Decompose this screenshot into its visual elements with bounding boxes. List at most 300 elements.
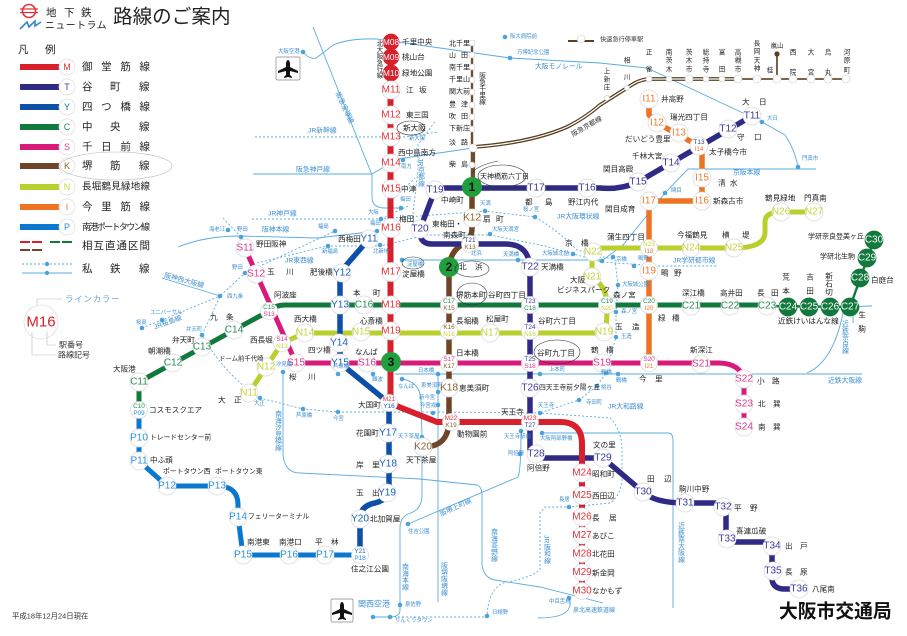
stations: Tanimachi: T29 (594, 452, 612, 464)
station name labels: 下新庄 (449, 124, 470, 132)
railway line names in blue: 近鉄大阪線 (828, 376, 862, 384)
stations: Nagahori Tsurumi-ryokuchi: N14 (296, 328, 315, 338)
stations: Nagahori Tsurumi-ryokuchi: N27 (805, 206, 824, 218)
stations: Chuo: C25 (800, 302, 819, 312)
station name labels: 正雀 (646, 48, 653, 74)
station name labels: 北浜 (459, 262, 483, 272)
private station names in blue: 梅田 (400, 195, 411, 203)
interchange stations with two numbers: K19 (445, 422, 457, 429)
stations: Chuo: C14 (225, 324, 244, 336)
stations: Sennichimae: S12 (247, 268, 265, 280)
Hankyu railway lines (469, 35, 850, 187)
interchange stations with two numbers: S17 (443, 356, 455, 363)
private station names in blue: 鶴橋 (616, 376, 627, 384)
station name labels: 河原町 (844, 48, 851, 74)
key: pointers (32, 332, 56, 355)
private station names in blue: 京橋 (616, 255, 627, 263)
stations: Imazatosuji (640, 90, 711, 280)
stations: Sakaisuji: K18 (440, 382, 458, 394)
private station names in blue: 今宮 (333, 414, 344, 422)
private station names in blue: 寺田町 (586, 398, 603, 406)
Hankyu link Nishinakajima to Awaji (391, 98, 473, 160)
stations: Chuo (130, 231, 884, 391)
Senboku rapid line (538, 598, 570, 618)
stations: Sennichimae: S22 (735, 374, 753, 384)
private station names in blue: 住吉公園 (408, 527, 430, 535)
station name labels: 西中島南方 (398, 147, 436, 157)
stations: Midosuji: M13 (381, 132, 401, 142)
private station names in blue: 大阪城公園 (622, 280, 649, 288)
station name labels: 八尾南 (812, 584, 835, 594)
private station names in blue: 天王寺 (538, 401, 555, 409)
railway line names in blue (153, 62, 862, 614)
private station names in blue: 天満 (480, 200, 491, 207)
stations: Chuo: C11 (130, 376, 148, 388)
Hanshin Nishi-Osaka line (162, 278, 220, 296)
stations: Nagahori Tsurumi-ryokuchi: N24 (682, 242, 701, 254)
station name labels: 天王寺 (501, 408, 524, 416)
private station names in blue: 森ノ宮 (621, 307, 637, 315)
station name labels: 富田 (719, 48, 726, 74)
stations: Sakaisuji: K20 (414, 442, 432, 452)
line: Nagahori Tsurumi-ryokuchi (249, 212, 814, 393)
station name labels: 鴫野 (661, 268, 682, 278)
Hanshin main line (178, 231, 378, 247)
station name labels: 鶴見緑地 (765, 192, 796, 202)
station name labels: 九条 (210, 312, 234, 322)
stations: Midosuji: M19 (381, 326, 401, 336)
stations: Midosuji: M16 (381, 222, 401, 234)
stations: Nagahori Tsurumi-ryokuchi: N15 (352, 326, 371, 338)
station name labels: 玉川 (267, 268, 294, 276)
stations: Midosuji: M09 (383, 52, 399, 62)
station name labels: 西長堀 (250, 336, 273, 344)
private station names in blue: 芦原橋 (333, 362, 350, 370)
station name labels: 新深江 (690, 346, 713, 354)
station name labels: 南森町 (443, 230, 466, 240)
station name labels: 岸里 (356, 460, 380, 470)
icon: subway logo (20, 4, 38, 18)
private station names in blue: 海老江 (209, 225, 226, 233)
legend: Chuo: C (64, 122, 71, 132)
station name labels: 朝潮橋 (148, 346, 171, 356)
legend: Chuo: 中央線 (82, 120, 150, 133)
stations: Tanimachi: T14 (662, 158, 680, 168)
private station names in blue: 長居 (559, 496, 570, 503)
stations: Chuo: C23 (758, 300, 777, 312)
stations: Nagahori Tsurumi-ryokuchi: N26 (772, 206, 791, 218)
railway line names in blue: 南海汐見橋線 (274, 409, 282, 452)
interchange stations with two numbers: T24 (524, 324, 536, 331)
Hankyu Senri rapid section (471, 148, 475, 187)
private station names in blue: 芦原橋 (296, 411, 313, 419)
station name labels: コスモスクエア (149, 406, 203, 414)
private station names in blue: 泉佐野 (405, 600, 422, 608)
station name labels: 大阪 (570, 274, 586, 284)
legend: Nagahori Tsurumi-ryokuchi: N (64, 182, 70, 192)
railway line names in blue: JR学研都市線 (673, 256, 715, 264)
line: Chuo east (767, 240, 874, 307)
station name labels: 谷町九丁目 (537, 348, 575, 358)
stations: Yotsubashi: Y14 (330, 338, 348, 348)
legend: Yotsubashi (20, 99, 150, 115)
marker 1: 1 (469, 180, 476, 194)
private station names in blue: 門真市 (802, 154, 819, 162)
interchange stations with two numbers: C10 (133, 403, 145, 410)
interchange stations with two numbers: M21 (383, 396, 396, 403)
legend: Yotsubashi: Y (64, 102, 70, 112)
station name labels: 守口 (737, 132, 762, 142)
station name labels: 鶴橋 (591, 344, 614, 354)
station name labels: 学研北生駒 (820, 252, 855, 260)
station name labels: 天下茶屋 (406, 454, 437, 464)
private station names in blue: 阪大病院前 (510, 32, 538, 40)
legend: private railways (22, 262, 150, 275)
label: new tram: ニュートラム (45, 20, 107, 32)
Hankai Uemachi line (408, 431, 521, 524)
station name labels: 江坂 (406, 84, 427, 94)
station name labels: 文の里 (593, 440, 616, 450)
stations: Yotsubashi: Y11 (360, 234, 378, 244)
interchange stations with two numbers: N16 (524, 331, 536, 338)
stations: Port Town (130, 429, 334, 564)
private station names in blue: 上本町 (549, 365, 566, 373)
stations: Tanimachi: T20 (411, 224, 429, 234)
private station names in blue: 鶴橋 (601, 368, 612, 376)
station name labels: 深江橋 (682, 288, 705, 298)
stations: Tanimachi: T11 (744, 110, 761, 122)
Hankyu Kobe line and Umeda spur (253, 163, 401, 208)
stations: Sennichimae: S23 (735, 398, 753, 410)
stations: Tanimachi: T16 (578, 182, 596, 194)
station name labels: 花園町 (356, 428, 379, 438)
railway line names in blue: JR阪和線 (542, 535, 551, 565)
railway line names in blue: JR京都線 (416, 158, 425, 188)
station name labels: 今里 (639, 374, 663, 384)
private station names in blue: ユニバーサル (150, 309, 183, 316)
legend: Midosuji: 御堂筋線 (82, 60, 150, 73)
legend: Sakaisuji: 堺筋線 (82, 159, 150, 172)
station name labels: 天満橋 (541, 262, 564, 272)
station name labels: 緑橋 (658, 312, 680, 322)
Nankai Shiomibashi and Koya lines (283, 372, 603, 603)
private station names in blue: 野田 (232, 263, 243, 271)
stations: Chuo: C29 (858, 252, 877, 264)
station name labels: 太子橋今市 (709, 146, 747, 156)
stations: Chuo: C22 (721, 300, 740, 312)
interchange stations with two numbers: Y16 (383, 403, 395, 410)
station name labels: 長堀橋 (456, 316, 479, 326)
header: operator logo and title (20, 4, 231, 32)
station name labels: なかもず (592, 586, 623, 596)
station name labels: 住之江公園 (351, 564, 389, 574)
station name labels: 西梅田 (338, 234, 361, 244)
station name labels: 田 (461, 52, 468, 60)
private station names in blue: 北新地 (373, 247, 390, 255)
stations: Midosuji: M18 (381, 300, 401, 310)
line: Sakaisuji (423, 187, 472, 447)
stations: Imazatosuji: I17 (642, 196, 656, 206)
stations: Tanimachi: T19 (426, 184, 444, 196)
interchange stations with two numbers: S13 (263, 311, 275, 318)
station name labels: 堺筋本町 (456, 290, 487, 300)
station name labels: 出戸 (785, 540, 808, 550)
private station names in blue: 玉造 (621, 332, 632, 340)
interchange stations with two numbers: S18 (524, 363, 536, 370)
station name labels: 長居 (592, 514, 617, 522)
railway line names in blue: 近鉄奈良線 (840, 319, 849, 355)
stations: Midosuji: M12 (381, 110, 401, 120)
stations: Chuo: C28 (851, 272, 870, 284)
marker 3: 3 (388, 355, 395, 369)
station name labels: だいどう豊里 (625, 134, 671, 144)
interchange stations with two numbers: S20 (643, 356, 655, 363)
stations: Nagahori Tsurumi-ryokuchi (240, 203, 824, 402)
station name labels: 昭和町 (592, 470, 615, 478)
station name labels: 今福鶴見 (677, 230, 708, 240)
station name labels: 新大阪 (403, 122, 426, 132)
station name labels: 四天王寺前夕陽ヶ丘 (539, 382, 600, 392)
railway line names in blue: 京阪本線 (733, 168, 760, 176)
private station names in blue: 福島 (318, 222, 329, 230)
station name labels: 森ノ宮 (613, 290, 636, 300)
interchange stations with two numbers: T21 (464, 237, 476, 244)
stations: Tanimachi: T32 (714, 502, 732, 512)
interchange stations with two numbers: K17 (443, 363, 455, 370)
legend: Nanko Port Town: 南港ポートタウン線 (82, 221, 150, 232)
railway line names in blue: 阪堺上町線 (438, 496, 473, 518)
stations: Midosuji: M24 (572, 468, 592, 478)
station name labels: 長岡天神 (754, 40, 761, 72)
station name labels: ドーム前千代崎 (219, 354, 264, 362)
private station names in blue: 弁天町 (186, 325, 203, 333)
railway line names in blue: 大阪モノレール (535, 62, 583, 70)
stations: Sennichimae: S21 (692, 358, 710, 370)
rapid express stop key (568, 35, 643, 44)
marker 2: 2 (446, 260, 453, 274)
station name labels: 谷町六丁目 (538, 316, 576, 326)
station name labels: 新森古市 (713, 196, 744, 206)
station name labels: 南茨木 (666, 48, 673, 74)
operator name: 大阪市交通局 (779, 600, 892, 622)
interchange stations with two numbers: C18 (524, 305, 536, 312)
stations: Midosuji (381, 34, 592, 600)
private station names in blue: 難波 (372, 375, 383, 383)
railway line names in blue: 阪急宝塚線 (334, 90, 356, 125)
railway line names in blue: JR新幹線 (308, 126, 337, 134)
station name labels (113, 36, 894, 596)
stations: Midosuji: M08 (383, 37, 399, 47)
Hankyu Senri stations (469, 40, 850, 168)
legend: Tanimachi: 谷町線 (82, 80, 150, 93)
station name labels: 南巽 (758, 422, 781, 432)
private station names in blue: 大阪 (368, 208, 379, 216)
legend: Sennichimae: S (64, 142, 70, 152)
legend: Imazatosuji: 今里筋線 (82, 200, 150, 213)
station name labels: 大阪港 (113, 364, 136, 374)
stations: Nagahori Tsurumi-ryokuchi: N25 (725, 242, 744, 254)
legend: Chuo (20, 119, 150, 135)
station name labels: 柴島 (449, 160, 468, 168)
interchange stations with two numbers: C17 (443, 298, 455, 305)
stations: Midosuji: M30 (572, 586, 592, 596)
dashed link Ebie (223, 218, 245, 248)
line: Yotsubashi (340, 239, 389, 555)
key: line colour pointer (37, 299, 62, 312)
subway lines (139, 41, 874, 591)
marker 1 (462, 177, 482, 197)
stations: Sennichimae: S11 (236, 242, 254, 254)
legend: Sakaisuji (20, 152, 172, 180)
stations: Midosuji: M27 (572, 530, 592, 541)
station name labels: 弁天町 (172, 334, 195, 344)
stations: Nagahori Tsurumi-ryokuchi: N22 (584, 246, 603, 258)
station name labels: 平林 (315, 536, 339, 546)
station name labels: 西田辺 (592, 492, 615, 500)
station name labels: 長原 (785, 568, 808, 576)
private station names in blue (136, 32, 819, 624)
station name labels: ポートタウン東 (215, 466, 263, 476)
station name labels: 北千里 (449, 38, 470, 48)
station name labels: 松屋町 (486, 314, 509, 324)
station name labels: 動物園前 (457, 428, 488, 438)
JR Kyoto line (381, 120, 436, 222)
stations: Tanimachi: T33 (718, 534, 736, 544)
station name labels: 北巽 (758, 400, 781, 408)
station name labels: 阪急千里線 (478, 71, 486, 106)
Hankyu Kyoto line centre (473, 79, 735, 147)
stations: Nagahori Tsurumi-ryokuchi: N21 (583, 272, 602, 282)
station name labels: 玉造 (615, 322, 640, 332)
station name labels: 近鉄けいはんな線 (778, 316, 839, 326)
private station names in blue: 南方 (401, 162, 412, 170)
JR loop west side (202, 232, 622, 617)
station name labels: 北加賀屋 (370, 514, 401, 524)
private station names in blue: 大阪空港 (278, 47, 300, 55)
station name labels: 淀屋橋 (402, 268, 425, 278)
legend: Nagahori Tsurumi-ryokuchi (20, 179, 150, 195)
stations: Tanimachi: T30 (634, 486, 652, 498)
JR Tozai line (257, 235, 718, 266)
stations: Imazatosuji: I15 (695, 172, 709, 184)
private station names in blue: 阿倍野 (508, 449, 525, 457)
private station names in blue: 梅田 (370, 219, 381, 227)
stations: Tanimachi: T28 (527, 448, 545, 460)
station name labels: 四ツ橋 (308, 344, 331, 354)
legend panel (18, 43, 172, 275)
legend: Sennichimae (20, 139, 150, 155)
railway line names in blue: 南海高野線 (490, 527, 498, 563)
stations: Yotsubashi: Y20 (351, 514, 369, 524)
station name labels: 横堤 (722, 230, 750, 240)
stations: Chuo: C24 (779, 302, 798, 312)
station name labels: 関目高殿 (603, 164, 634, 174)
station name labels: 関大前 (449, 86, 470, 96)
stations: Sakaisuji: K12 (463, 212, 481, 224)
railway line names in blue: 阪堺阪堺線 (440, 561, 448, 597)
railway line names in blue: JR大阪環状線 (557, 212, 599, 220)
private station names in blue: 汐見橋 (276, 360, 293, 368)
interchange stations with two numbers: C15 (263, 304, 275, 311)
station name labels: 総持寺 (703, 48, 710, 74)
legend: Tanimachi (20, 79, 150, 95)
railway line names in blue: 南海本線 (400, 562, 409, 591)
legend: Sennichimae: 千日前線 (82, 140, 150, 153)
station name labels: 烏丸 (825, 48, 832, 76)
private station names in blue: 新今宮 (419, 393, 435, 401)
line: Port Town (139, 410, 360, 555)
stations: Port Town: P10 (130, 432, 148, 444)
stations: Midosuji: M11 (382, 84, 401, 96)
railway line names in blue: JR神戸線 (268, 208, 297, 218)
railway line names in blue: 阪急神戸線 (296, 164, 330, 174)
legend: station number key (24, 294, 120, 360)
station name labels: フェリーターミナル (248, 512, 309, 520)
legend: Midosuji: M (63, 62, 71, 72)
station name labels: 井高野 (661, 94, 684, 104)
key: line symbol label: 路線記号 (58, 350, 90, 360)
stations: Tanimachi: T26 (521, 382, 539, 394)
interchange stations with two numbers: N18 (443, 331, 455, 338)
station name labels: 阿倍野 (527, 462, 550, 472)
station name labels: 蒲生四丁目 (607, 232, 645, 242)
interchange stations with two numbers: C20 (643, 298, 655, 305)
stations: Nagahori Tsurumi-ryokuchi: N19 (595, 326, 614, 338)
title: 路線のご案内 (113, 6, 231, 28)
stations: Nagahori Tsurumi-ryokuchi: N17 (481, 328, 500, 338)
stations: Tanimachi: T15 (629, 176, 647, 188)
Hankyu Kyoto line express section (473, 79, 735, 147)
icon: Osaka airport plane (276, 57, 300, 80)
station name labels: 中津 (401, 184, 417, 194)
interchange stations with two numbers: T25 (524, 356, 536, 363)
legend: Midosuji (20, 59, 150, 75)
station name labels: なんば (355, 348, 378, 356)
interchange stations with two numbers: Y21 (354, 548, 366, 555)
marker 3 (381, 352, 401, 372)
private station names in blue: 西九条 (227, 292, 244, 300)
stations: Chuo: C26 (821, 302, 840, 312)
marker 2 (439, 257, 459, 277)
Keihan main line (402, 169, 816, 260)
stations: Yotsubashi: Y13 (331, 300, 349, 310)
station name labels: 小路 (757, 376, 780, 386)
legend: Nanko Port Town: P (64, 222, 70, 232)
station name labels: 大日 (742, 96, 767, 106)
station name labels: あびこ (592, 532, 615, 540)
stations: Yotsubashi: Y19 (378, 488, 396, 498)
legend: private railways: 私鉄線 (82, 262, 150, 275)
interchange stations with two numbers: I21 (645, 363, 654, 370)
station name labels: 相川 (624, 56, 631, 82)
station name labels: 喜連瓜破 (736, 526, 767, 536)
private station names in blue: 天下茶屋 (398, 432, 420, 440)
stations: Port Town: P11 (130, 456, 148, 466)
stations: Midosuji: M25 (572, 490, 592, 501)
private station names in blue: 大阪城北詰 (542, 249, 570, 257)
Nankai main line (373, 379, 422, 617)
station name labels: 東三国 (406, 110, 429, 120)
stations: Tanimachi: T36 (790, 584, 808, 594)
station name labels: 南港東 (247, 536, 270, 546)
station name labels: 長田 (757, 288, 779, 298)
stations: Port Town: P16 (280, 550, 298, 560)
interchange stations with two numbers: I18 (645, 248, 654, 255)
station name labels: 平野 (734, 504, 758, 512)
stations: Imazatosuji: I19 (642, 266, 656, 276)
stations: Port Town: P15 (234, 550, 252, 560)
station name labels: 上新庄 (604, 66, 611, 92)
